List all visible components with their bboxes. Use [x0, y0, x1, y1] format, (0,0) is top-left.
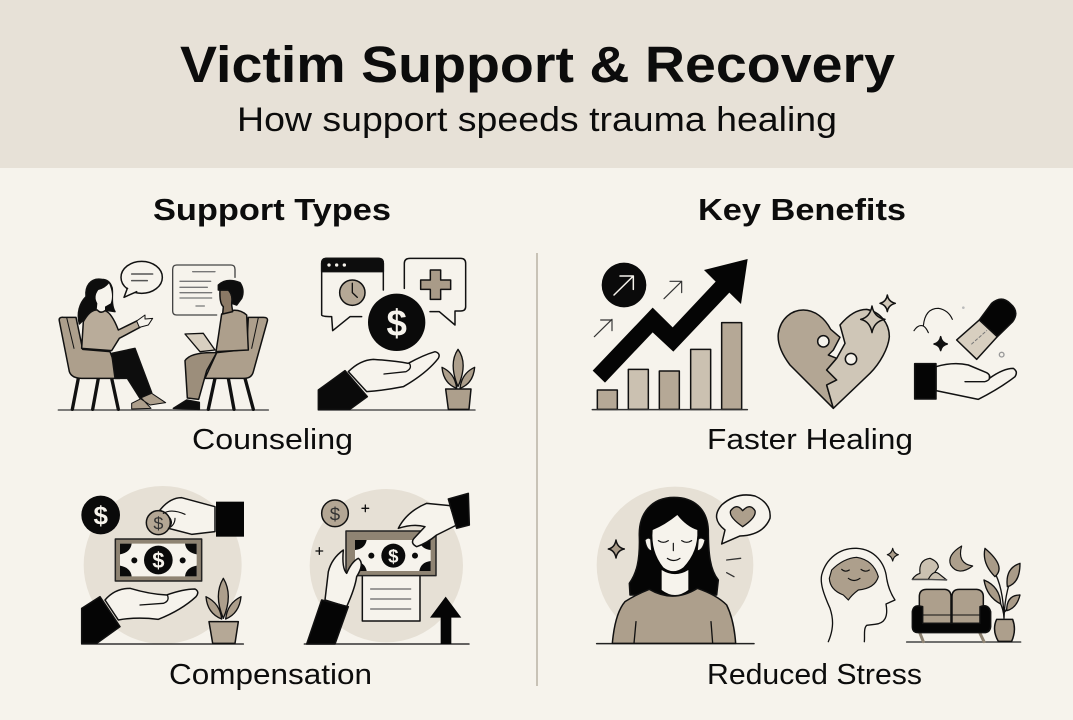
icon: money exchanged between hands: $ [93, 500, 108, 530]
label: Reduced Stress: Reduced Stress [707, 659, 922, 691]
header band [0, 0, 1073, 168]
panel: counseling illustrations [58, 258, 475, 410]
bar chart with rising arrow [592, 259, 748, 410]
heading: Support Types: Support Types [153, 192, 391, 227]
label: Faster Healing: Faster Healing [707, 424, 913, 456]
subtitle: How support speeds trauma healing [237, 101, 837, 139]
icon: banknote handover and receipt [304, 489, 469, 644]
divider [536, 253, 538, 686]
title: Victim Support & Recovery [180, 36, 896, 93]
icon: financial support hand: $ [386, 302, 407, 343]
panel: faster healing illustrations [592, 259, 1016, 410]
icon: banknote handover and receipt: $ [330, 503, 341, 524]
icon: calm brain in head [821, 548, 898, 642]
panel: compensation illustrations [81, 486, 469, 644]
label: Compensation: Compensation [169, 659, 372, 691]
icon: money exchanged between hands: $ [153, 513, 163, 533]
heading: Key Benefits: Key Benefits [698, 192, 906, 227]
icon: banknote handover and receipt: $ [388, 545, 399, 566]
icon: sofa with plant and moon [907, 546, 1021, 642]
panel: reduced stress illustrations [597, 487, 1021, 644]
icon: money exchanged between hands [81, 486, 244, 644]
label: Counseling: Counseling [192, 424, 353, 456]
icon: money exchanged between hands: $ [152, 548, 164, 573]
icon: financial support hand [318, 258, 475, 410]
icon: calm woman [597, 487, 770, 644]
icon: mending heart [778, 295, 895, 408]
icon: counseling scene [58, 261, 268, 410]
icon: pill over open hand [914, 299, 1016, 399]
